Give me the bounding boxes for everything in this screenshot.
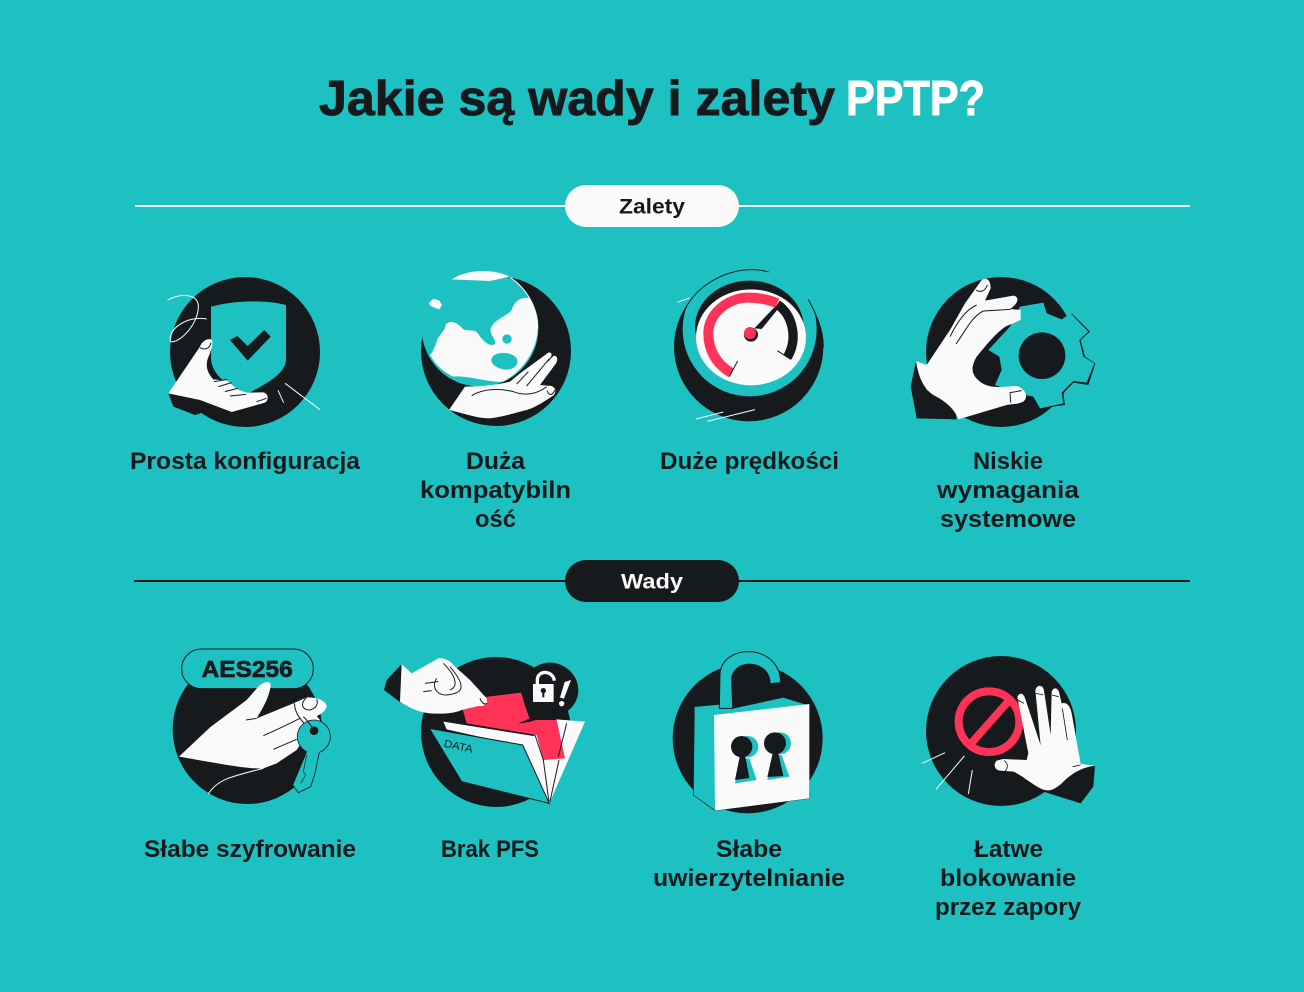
label: Słabe [716,836,782,863]
panel: Słabe szyfrowanie [144,649,356,863]
label: Brak PFS [441,836,539,863]
label: Niskie [973,448,1043,475]
panel: Prosta konfiguracja [130,277,361,475]
icon: hand with key and AES256 badge [173,649,330,804]
label: Duże prędkości [660,448,839,475]
label [936,448,1080,533]
title: PPTP? [846,72,985,126]
panel: Łatwe blokowanie przez zapory [922,656,1095,921]
panel: Słabe uwierzytelnianie [653,652,845,892]
icon: padlock with two keyholes [673,652,823,813]
section pill: Wady: Wady [621,570,683,594]
label: kompatybiln [420,477,571,504]
label: Duża [466,448,526,475]
icon: hand taking document from data folder: DATA [443,738,475,756]
label [420,448,571,533]
label [935,836,1082,921]
label: ość [475,506,516,533]
icon: hand with prohibition sign [922,656,1095,806]
icon: speedometer [674,262,823,421]
icon: hand taking document from data folder [384,657,585,807]
section pill: Zalety [565,185,739,227]
icon: hand with key and AES256 badge: AES256 [202,656,293,682]
label [653,836,845,892]
label: Słabe szyfrowanie [144,836,356,863]
title: Jakie są wady i zalety [319,72,835,126]
label: Łatwe [974,836,1043,863]
label: blokowanie [940,865,1076,892]
panel: Niskie wymagania systemowe [911,277,1095,533]
label: uwierzytelnianie [653,865,845,892]
label: Prosta konfiguracja [130,448,361,475]
label: wymagania [936,477,1080,504]
label: przez zapory [935,894,1082,921]
label: systemowe [940,506,1076,533]
icon: hand holding gear [911,277,1095,427]
section pill: Zalety: Zalety [619,196,685,218]
icon: hand holding shield [168,277,320,427]
section pill: Wady [565,560,739,602]
panel: Duża kompatybilność [420,270,571,533]
panel: Brak PFS [384,657,585,863]
icon: hand holding globe [421,270,571,426]
panel: Duże prędkości [660,262,839,475]
